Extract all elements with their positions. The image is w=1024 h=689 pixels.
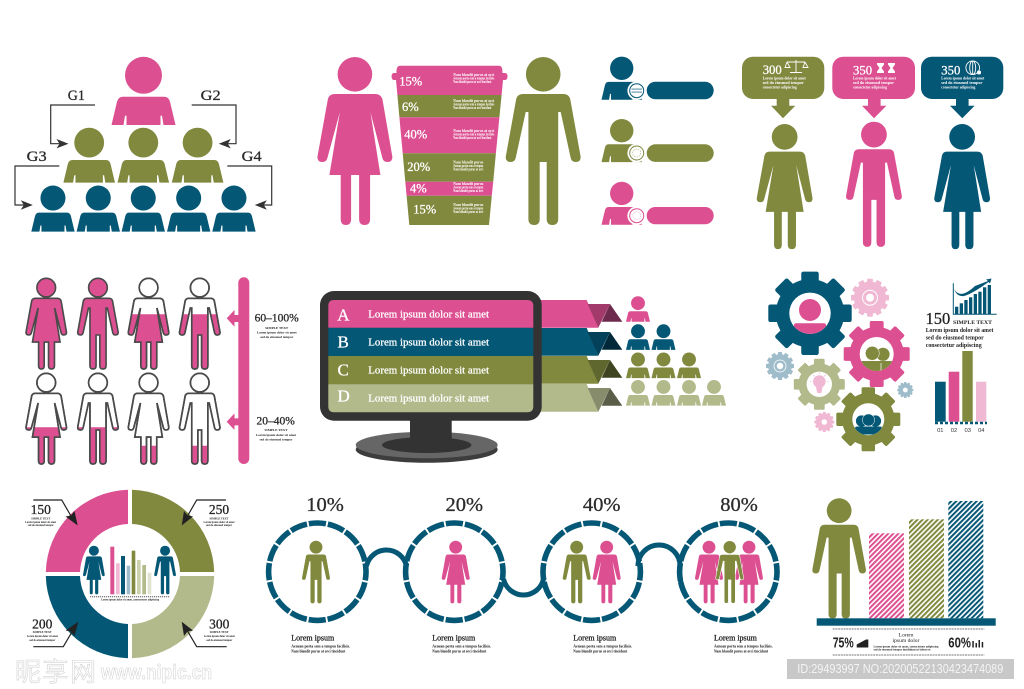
text: 20-40%: Lorem ipsum dolor sit amet — [256, 433, 297, 437]
icon: top person — [112, 57, 176, 125]
footer stats: sed do eiusmod tempor incididunt ut labore et — [874, 648, 931, 652]
ribbon: D — [535, 384, 622, 412]
label: 200: Lorem ipsum dolor sit amet — [27, 635, 58, 638]
gear: olive — [836, 387, 900, 451]
footer stats: ipsum dolor — [893, 638, 920, 644]
ring: 80%: 80% — [720, 494, 758, 516]
gear: pale pink — [851, 279, 889, 317]
callout: blue: 350 — [941, 64, 960, 78]
icon: woman partial — [128, 278, 169, 369]
panel: gears — [766, 272, 913, 451]
connectors — [366, 545, 680, 595]
chart: four bars: 04 — [978, 428, 985, 434]
row: pink — [602, 182, 714, 225]
text: cup percents: 4% — [410, 182, 427, 196]
icons: blue row — [31, 186, 256, 232]
scale bar with arrows — [227, 277, 249, 464]
arrow: G3 — [15, 166, 59, 210]
text: cup captions: Nam blandit purus at orci tincidunt — [453, 80, 492, 84]
icons: olive row — [63, 128, 223, 183]
ring: 40%: Aenean porta sem a tempus facilisis. — [573, 645, 632, 649]
icon: woman low — [26, 373, 66, 464]
band text: Lorem ipsum dolor sit amet — [368, 392, 489, 404]
gear: small blue-grey — [766, 352, 794, 380]
donut: blue quadrant — [46, 576, 128, 658]
band text: A — [337, 305, 350, 324]
icon: woman — [317, 57, 392, 225]
ribbon: B — [535, 328, 622, 356]
icon: man full — [78, 278, 118, 369]
band text: Lorem ipsum dolor sit amet — [368, 336, 489, 348]
icon: man lowest — [180, 373, 220, 464]
text: cup captions: Nam blandit purus at orci tincidunt — [453, 106, 492, 110]
monitor frame — [320, 291, 542, 421]
icon: pink man — [846, 122, 902, 247]
footer stats: Lorem — [899, 633, 914, 639]
panel: person pill rows — [602, 57, 714, 225]
panel: fill-level figures — [26, 277, 299, 464]
text: cup captions: Nam blandit purus — [453, 160, 484, 164]
text: 20-40%: 20–40% — [257, 415, 295, 427]
footer stats: Lorem ipsum dolor sit amet, consectetuer adipiscing — [874, 644, 939, 648]
ring: 20%: 20% — [446, 494, 483, 516]
donut: olive quadrant — [132, 490, 214, 572]
callout: olive — [742, 57, 824, 118]
panel: small charts — [926, 278, 997, 434]
footer stats — [833, 629, 984, 655]
ring: 80% — [672, 494, 785, 654]
footer stats: 75% — [833, 636, 854, 652]
text: 60-100%: 60–100% — [255, 313, 299, 325]
donut: pink quadrant — [46, 490, 128, 572]
callout: pink: consectetur adipiscing — [853, 84, 888, 89]
ring: 80%: Nam blandit purus at orci tincidunt — [714, 650, 769, 654]
band text: D — [338, 387, 350, 406]
text: cup captions: Aenean porta sem a tempus — [453, 206, 484, 210]
centre icon: woman — [83, 546, 105, 594]
ring: 10%: 10% — [306, 494, 344, 516]
ring: 10% — [261, 494, 374, 654]
text: cup percents — [399, 75, 436, 217]
panel: group pyramid — [15, 57, 272, 232]
text: cup captions: Nam blandit purus — [453, 182, 484, 186]
icon: olive woman — [757, 124, 813, 249]
ring: 40% — [535, 494, 648, 654]
text: cup captions: Aenean porta sem a tempus — [453, 186, 484, 190]
label: 300: SIMPLE TEXT — [210, 631, 229, 634]
hatched bars — [869, 501, 983, 618]
text: 150 simple text: 150 — [926, 309, 950, 328]
text: 20-40%: SIMPLE TEXT — [264, 428, 288, 432]
text: cup captions: Aenean porta sem a tempus — [453, 164, 484, 168]
label: 250: sed do eiusmod tempor — [206, 524, 233, 527]
watermark: id bar — [787, 659, 1014, 679]
chart: four bars: 01 — [937, 428, 944, 434]
callout: pink: Lorem ipsum dolor sit amet — [853, 75, 897, 80]
row: olive — [602, 119, 714, 162]
panel: person with hatched bars — [812, 498, 996, 655]
icon: hourglasses — [877, 63, 895, 73]
text: cup captions: Nam blandit purus at orci — [453, 73, 494, 77]
ring: 20%: Aenean porta sem a tempus facilisis. — [432, 645, 491, 649]
callout: blue: consectetur adipiscing — [941, 84, 976, 89]
label: 250: 250 — [209, 502, 229, 517]
icon: woman lowest — [128, 373, 169, 464]
callout: blue: Lorem ipsum dolor sit amet — [941, 75, 985, 80]
text: cup percents: 15% — [399, 75, 422, 89]
donut: light quadrant — [132, 576, 214, 658]
text: cup captions: Aenean porta sem a tempus facilisis — [453, 102, 495, 106]
callout: pink: sed do eiusmod tempor — [853, 80, 894, 85]
text: 60-100%: SIMPLE TEXT — [265, 326, 289, 330]
label: 250 — [204, 502, 235, 527]
ring: 10%: Aenean porta sem a tempus facilisis. — [291, 645, 350, 649]
monitor stand — [356, 415, 498, 463]
text: cup captions: Nam blandit purus at orci — [453, 210, 483, 214]
people rows — [626, 296, 726, 406]
panel: percentage rings — [261, 494, 785, 654]
icon: man low — [78, 373, 118, 464]
text: cup captions: Aenean porta sem a tempus facilisis — [453, 76, 495, 80]
text: cup captions: Nam blandit purus at orci — [453, 129, 494, 133]
label: 300: 300 — [209, 616, 230, 631]
ring: 40%: Nam blandit purus at orci tincidunt — [573, 650, 628, 654]
text: cup captions: Aenean porta sem a tempus facilisis — [453, 132, 495, 136]
icon: man — [812, 498, 866, 619]
gear: tiny blue-grey — [897, 382, 913, 398]
label: G1: G1 — [68, 88, 85, 104]
icon: blue woman — [934, 124, 990, 249]
icon: light bulb — [810, 372, 828, 393]
text: cup percents: 40% — [404, 127, 427, 141]
ring: 40%: Lorem ipsum — [573, 633, 617, 642]
ribbon: C — [535, 356, 622, 384]
base bar — [817, 618, 996, 626]
band text: B — [338, 333, 349, 352]
gear: large blue — [768, 272, 852, 355]
gear: small pale pink — [814, 412, 834, 432]
label: 200 — [27, 616, 58, 642]
label: 300 — [204, 616, 235, 642]
arrow: G2 — [192, 105, 236, 148]
callout: olive: sed do eiusmod tempor — [763, 80, 804, 85]
row: blue — [602, 57, 714, 100]
centre bars — [90, 547, 170, 597]
text: cup percents: 6% — [402, 100, 419, 114]
callout: pink: 350 — [853, 64, 872, 78]
text: 20-40% — [256, 415, 297, 442]
text: cup captions: Nam blandit purus at orci tincidunt — [453, 136, 492, 140]
panel: monitor ribbons — [320, 291, 726, 463]
arrow: G1 — [51, 105, 95, 148]
callout: olive: Lorem ipsum dolor sit amet — [763, 75, 806, 80]
chart: four bars: 03 — [964, 428, 971, 434]
panel: donut chart — [25, 490, 235, 658]
label: 250: Lorem ipsum dolor sit amet — [204, 521, 235, 524]
icon: man partial — [180, 278, 220, 369]
icon: woman full — [26, 278, 66, 369]
text: 60-100%: sed do eiusmod tempor — [260, 335, 294, 339]
label: 150: SIMPLE TEXT — [31, 518, 50, 520]
icon: scales — [785, 60, 808, 72]
label: 200: sed do eiusmod tempor — [29, 639, 56, 642]
band text: C — [338, 360, 349, 380]
watermark: site logo — [15, 652, 212, 689]
label: 150: sed do eiusmod tempor — [28, 524, 54, 527]
footer stats: 60% — [948, 636, 971, 652]
label: 200: 200 — [32, 616, 53, 631]
label: 150 — [25, 502, 56, 527]
text: 60-100%: Lorem ipsum dolor sit amet — [257, 331, 298, 335]
label: 150: 150 — [31, 502, 51, 517]
text: cup captions — [453, 73, 495, 214]
ring: 20% — [398, 494, 511, 654]
arrows — [33, 500, 227, 647]
label: G4: G4 — [242, 149, 262, 165]
text: 150 simple text — [926, 309, 994, 349]
ring: 80%: Aenean porta sem a tempus facilisis. — [714, 645, 773, 649]
ring: 40%: 40% — [583, 494, 620, 516]
panel: callout people — [742, 57, 1003, 249]
watermark: site logo: 昵享网 — [15, 652, 96, 689]
label: 150: Lorem ipsum dolor sit amet — [25, 521, 56, 524]
band text: Lorem ipsum dolor sit amet — [368, 364, 489, 376]
chart: cup bands — [392, 66, 508, 225]
label: 300: sed do eiusmod tempor — [206, 639, 233, 642]
callout: blue — [921, 57, 1003, 118]
label: G3: G3 — [27, 149, 47, 165]
callout: olive: consectetur adipiscing — [763, 84, 797, 89]
text: cup captions: Nam blandit purus at orci — [453, 167, 483, 171]
label: G2: G2 — [201, 88, 221, 104]
ring: 80%: Lorem ipsum — [714, 633, 758, 642]
text: cup captions: Nam blandit purus at orci — [453, 99, 494, 103]
icon: globe — [966, 61, 981, 74]
ring: 10%: Nam blandit purus at orci tincidunt — [291, 650, 346, 654]
label: 250: SIMPLE TEXT — [210, 518, 229, 520]
band text — [337, 305, 489, 406]
text: 150 simple text: consectetur adipiscing — [926, 342, 982, 349]
panel: cup percentages — [317, 57, 581, 225]
gear: light olive — [794, 359, 845, 410]
text: cup captions: Nam blandit purus — [453, 203, 484, 207]
text: 150 simple text: sed do eiusmod tempor — [926, 334, 984, 342]
ring: 20%: Lorem ipsum — [432, 633, 476, 642]
chart: growth bars — [953, 278, 997, 314]
callout: blue: sed do eiusmod tempor — [941, 80, 982, 85]
band text: Lorem ipsum dolor sit amet — [368, 308, 489, 320]
ribbon: A — [535, 300, 622, 328]
ring: 20%: Nam blandit purus at orci tincidunt — [432, 650, 487, 654]
text: cup percents: 15% — [413, 203, 436, 217]
icon: man — [506, 57, 581, 225]
text: 150 simple text: Lorem ipsum dolor sit amet — [926, 327, 994, 334]
watermark: site logo: www.nipic.cn — [100, 662, 212, 684]
callout: olive: 300 — [763, 63, 782, 77]
screen bands — [328, 300, 533, 412]
text: 20-40%: sed do eiusmod tempor — [260, 438, 293, 442]
gear: pink — [844, 321, 910, 387]
chart: four bars: 02 — [951, 428, 957, 434]
label: 300: Lorem ipsum dolor sit amet — [204, 635, 235, 638]
text: cup captions: Nam blandit purus at orci — [453, 189, 483, 193]
text: cup percents: 20% — [407, 160, 430, 174]
label: 200: SIMPLE TEXT — [33, 631, 52, 634]
arrow: G4 — [227, 166, 272, 210]
chart: four bars — [935, 351, 987, 434]
centre caption: Lorem ipsum dolor sit amet, consectetuer adipiscing — [101, 598, 159, 602]
ring: 10%: Lorem ipsum — [291, 633, 335, 642]
text: 150 simple text: SIMPLE TEXT — [953, 320, 992, 326]
centre icon: man — [154, 546, 176, 594]
callout: pink — [832, 57, 915, 118]
text: 60-100% — [255, 313, 299, 339]
